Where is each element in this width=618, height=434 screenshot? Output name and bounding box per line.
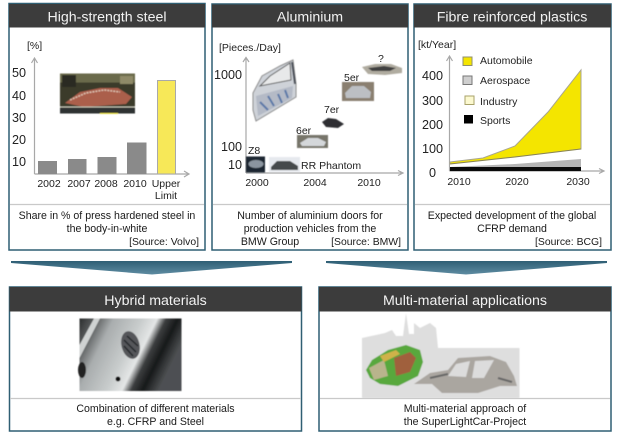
caption: multi-material applications: the SuperLightCar-Project <box>404 416 526 428</box>
area chart: CFRP demand: 100 <box>422 142 443 156</box>
heading: hybrid materials: Hybrid materials <box>104 293 207 309</box>
bar chart: press hardened steel share: 50 <box>12 66 26 80</box>
caption: high-strength steel: [Source: Volvo] <box>129 237 199 248</box>
caption: fibre reinforced plastics <box>428 210 602 248</box>
legend: CFRP sectors: Aerospace <box>480 75 530 87</box>
bar chart: press hardened steel share: 2008 <box>94 178 118 190</box>
legend: CFRP sectors: Industry <box>480 96 518 108</box>
caption: hybrid materials: Combination of different materials <box>76 403 235 415</box>
heading: multi-material applications <box>319 287 611 312</box>
area chart: CFRP demand: 2030 <box>566 176 590 188</box>
chart: aluminium door production: RR Phantom <box>301 160 361 172</box>
area chart: CFRP demand: 2020 <box>505 176 529 188</box>
bar chart: press hardened steel share: 2007 <box>67 178 91 190</box>
caption: fibre reinforced plastics: CFRP demand <box>477 223 547 235</box>
area chart: CFRP demand: 0 <box>429 166 436 180</box>
chart: aluminium door production: [Pieces./Day] <box>219 42 281 54</box>
caption: multi-material applications: Multi-material approach of <box>404 403 526 415</box>
chart: aluminium door production: 10 <box>228 158 242 172</box>
caption: aluminium: BMW Group <box>241 236 299 248</box>
panel: aluminium <box>212 4 408 250</box>
bar chart: press hardened steel share: 2010 <box>123 178 147 190</box>
chart: aluminium door production: 2004 <box>303 177 327 189</box>
arrow: right <box>326 261 607 274</box>
bar chart: press hardened steel share: 2002 <box>37 178 61 190</box>
chart: aluminium door production <box>214 42 403 189</box>
bar chart: press hardened steel share: 10 <box>12 155 26 169</box>
bar chart: press hardened steel share <box>12 40 189 202</box>
photo: press hardened body part <box>60 74 135 114</box>
chart: aluminium door production: 2010 <box>357 177 381 189</box>
chart: aluminium door production: 2000 <box>245 177 269 189</box>
caption: aluminium: Number of aluminium doors for <box>237 210 383 222</box>
caption: hybrid materials <box>76 403 235 428</box>
area chart: CFRP demand: 400 <box>422 69 443 83</box>
caption: aluminium <box>237 210 401 248</box>
caption: aluminium: [Source: BMW] <box>331 237 401 248</box>
caption: high-strength steel: the body-in-white <box>67 223 147 235</box>
panel: high-strength steel <box>9 4 205 250</box>
caption: aluminium: production vehicles from the <box>244 223 376 235</box>
bar chart: press hardened steel share: Limit <box>155 190 177 202</box>
panel: hybrid materials <box>10 287 302 431</box>
photo: hybrid steel and CFRP part <box>78 318 182 391</box>
area chart: CFRP demand: 200 <box>422 118 443 132</box>
area chart: CFRP demand <box>418 39 604 188</box>
heading: high-strength steel <box>9 4 205 28</box>
heading: fibre reinforced plastics <box>414 4 611 28</box>
caption: fibre reinforced plastics: [Source: BCG] <box>535 237 602 248</box>
chart: aluminium door production: 100 <box>221 140 242 154</box>
illustration: city skyline with car bodies <box>362 313 520 398</box>
bar chart: press hardened steel share: Upper <box>152 178 181 190</box>
bar chart: press hardened steel share: 20 <box>12 133 26 147</box>
caption: high-strength steel: Share in % of press hardened steel in <box>19 210 195 222</box>
chart: aluminium door production: 7er <box>324 104 340 116</box>
legend: CFRP sectors: Sports <box>480 115 510 127</box>
bar chart: press hardened steel share: [%] <box>27 40 42 52</box>
heading: hybrid materials <box>10 287 302 312</box>
arrow: left <box>11 261 292 274</box>
heading: aluminium: Aluminium <box>277 10 343 26</box>
caption: high-strength steel <box>19 210 199 248</box>
heading: multi-material applications: Multi-material applications <box>383 293 547 309</box>
bar chart: press hardened steel share: 30 <box>12 111 26 125</box>
area chart: CFRP demand: 2010 <box>447 176 471 188</box>
area chart: CFRP demand: [kt/Year] <box>418 39 456 51</box>
caption: hybrid materials: e.g. CFRP and Steel <box>107 416 204 428</box>
chart: aluminium door production: 5er <box>344 72 360 84</box>
area chart: CFRP demand: 300 <box>422 94 443 108</box>
legend: CFRP sectors: Automobile <box>480 55 533 67</box>
icon: vehicle photos <box>246 64 402 172</box>
legend: CFRP sectors <box>463 55 533 127</box>
heading: aluminium <box>212 4 408 28</box>
chart: aluminium door production: 6er <box>296 125 312 137</box>
bar chart: press hardened steel share: 40 <box>12 89 26 103</box>
icon: aluminium car door <box>253 60 296 121</box>
panel: fibre reinforced plastics <box>414 4 611 250</box>
chart: aluminium door production: 1000 <box>214 68 242 82</box>
heading: high-strength steel: High-strength steel <box>47 10 167 26</box>
caption: multi-material applications <box>404 403 526 428</box>
heading: fibre reinforced plastics: Fibre reinforced plastics <box>437 10 587 26</box>
caption: fibre reinforced plastics: Expected development of the global <box>428 210 596 222</box>
panel: multi-material applications <box>319 287 611 431</box>
chart: aluminium door production: Z8 <box>248 145 260 157</box>
chart: aluminium door production: ? <box>378 53 384 65</box>
